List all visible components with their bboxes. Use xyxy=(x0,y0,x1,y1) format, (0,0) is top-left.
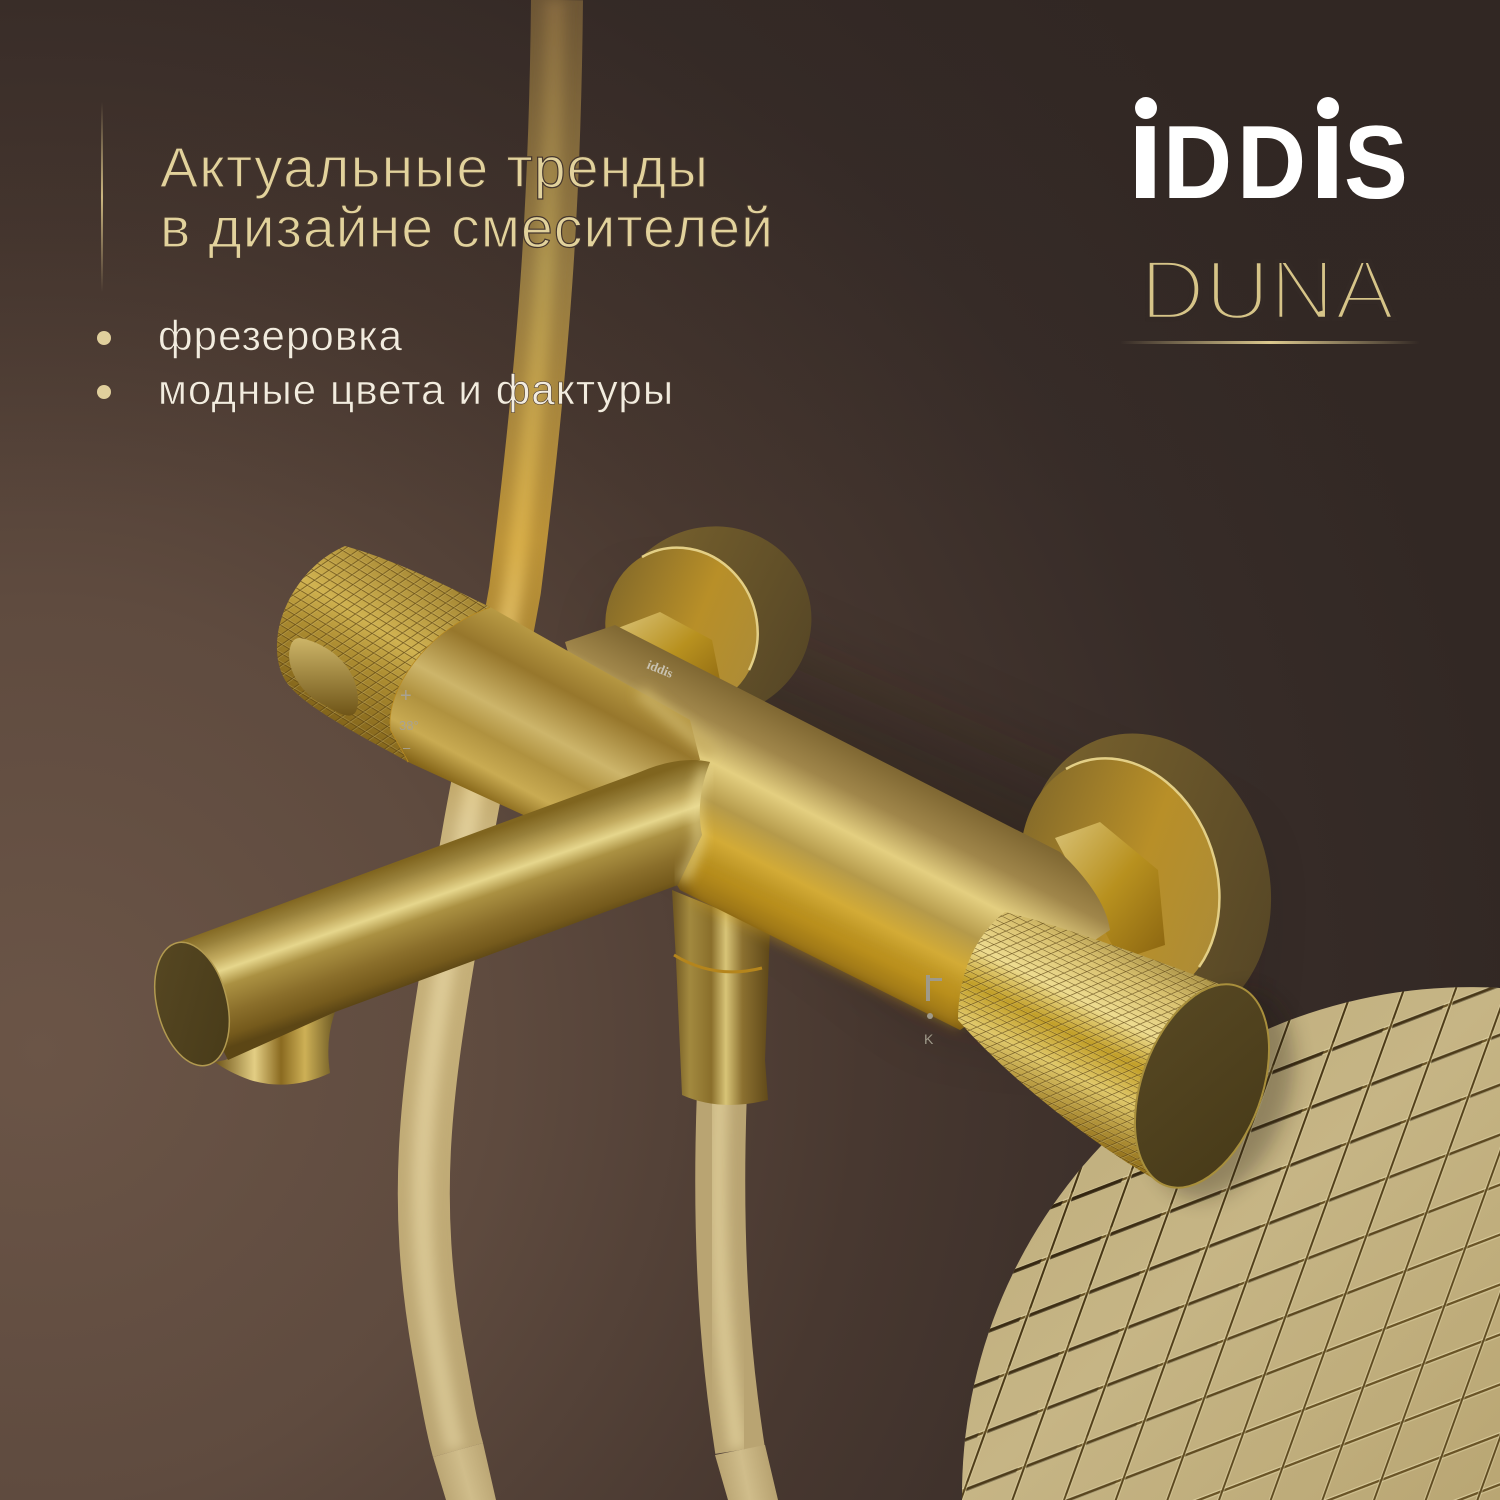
temperature marks: 38° xyxy=(399,718,419,733)
logo iDDiS: i xyxy=(1308,75,1346,227)
shadow of knob on shower plate xyxy=(1123,971,1321,1219)
engraved brand on bar: iddis xyxy=(645,657,675,681)
bullet two: модные цвета и фактуры xyxy=(158,366,673,413)
wall flange left xyxy=(583,499,838,745)
hose: upper and rear section xyxy=(422,0,557,1500)
junction highlight xyxy=(682,768,706,880)
temperature marks: + xyxy=(400,685,412,707)
flat recess xyxy=(289,638,358,716)
logo iDDiS xyxy=(1135,97,1404,199)
title: в дизайне смесителей xyxy=(160,196,773,260)
shower head plate with diamond relief xyxy=(962,987,1500,1500)
wall shadow behind faucet xyxy=(620,600,1230,1030)
bullet list xyxy=(97,312,673,413)
diverter marks on body: K xyxy=(924,1031,934,1047)
bullet one: фрезеровка xyxy=(158,312,403,359)
title: Актуальные тренды xyxy=(160,136,708,200)
knurled knob left xyxy=(277,546,490,762)
temperature marks: – xyxy=(403,740,411,755)
knurled knob right xyxy=(958,912,1295,1206)
spout tube xyxy=(170,760,710,1060)
nozzle xyxy=(215,1012,335,1085)
body lower highlight near junction xyxy=(687,860,960,1030)
logo iDDiS: D xyxy=(1237,105,1306,221)
logo underline xyxy=(1120,341,1420,344)
diverter marks on body xyxy=(924,975,942,1047)
series name DUNA: DUNA xyxy=(1140,244,1395,337)
end disc xyxy=(1109,966,1295,1206)
spout xyxy=(143,760,710,1085)
wall flange right xyxy=(988,701,1308,1059)
vertical accent line xyxy=(101,102,103,292)
seam blend between cylinder and bar xyxy=(640,692,712,752)
logo iDDiS: S xyxy=(1344,105,1408,221)
logo iDDiS: D xyxy=(1163,105,1232,221)
spout end disc xyxy=(143,934,241,1074)
title xyxy=(160,136,773,260)
hose: lower section xyxy=(715,1090,778,1500)
thermostat cylinder left xyxy=(390,607,700,818)
logo iDDiS: i xyxy=(1126,75,1164,227)
temperature marks xyxy=(399,685,419,755)
faucet body bar xyxy=(565,625,1110,1030)
lower connector to hose xyxy=(672,890,770,1105)
